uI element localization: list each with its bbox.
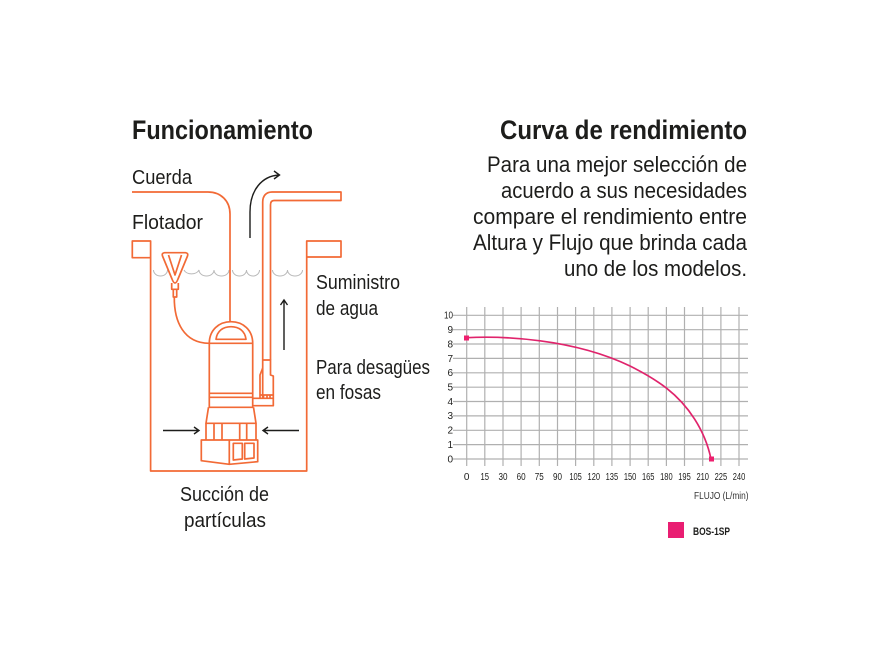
discharge pipe <box>263 192 341 398</box>
label: Succión de partículas <box>180 484 269 532</box>
x axis labels: 195 <box>678 472 691 483</box>
label: Para desagües en fosas <box>316 357 430 404</box>
x axis labels: 90 <box>553 472 562 483</box>
axis title: FLUJO (L/min) <box>694 491 748 502</box>
pit walls <box>132 241 341 471</box>
legend <box>668 522 730 538</box>
y axis labels: 9 <box>447 325 453 336</box>
arrow: water out <box>250 171 280 238</box>
arrow: suction right <box>263 427 299 434</box>
y axis labels <box>444 310 453 466</box>
legend label: BOS-1SP <box>693 526 730 538</box>
x axis labels: 30 <box>498 472 508 483</box>
y axis labels: 10 <box>444 310 453 322</box>
legend swatch <box>668 522 684 538</box>
y axis labels: 0 <box>447 454 453 466</box>
heading: Funcionamiento: Funcionamiento <box>132 115 313 145</box>
y axis labels: 6 <box>447 368 453 379</box>
x axis labels <box>464 472 746 483</box>
x axis labels: 225 <box>715 472 727 483</box>
x axis labels: 135 <box>606 472 618 483</box>
chart: performance curve <box>444 307 748 502</box>
label: Cuerda: Cuerda <box>132 167 193 189</box>
x axis labels: 210 <box>696 472 709 483</box>
text block: description: compare el rendimiento entre <box>473 204 747 229</box>
pump <box>201 322 273 464</box>
label: Succión de partículas: partículas <box>184 510 266 532</box>
curve <box>467 337 711 459</box>
x axis labels: 240 <box>733 472 746 483</box>
label: Suministro de agua: de agua <box>316 298 379 320</box>
text block: description: acuerdo a sus necesidades <box>501 178 747 203</box>
x axis labels: 15 <box>481 472 489 483</box>
label: Suministro de agua: Suministro <box>316 272 400 294</box>
grid <box>453 307 748 466</box>
y axis labels: 1 <box>447 440 453 451</box>
y axis labels: 8 <box>447 340 453 350</box>
x axis labels: 180 <box>660 472 673 483</box>
text block: description: uno de los modelos. <box>564 256 747 281</box>
label: Succión de partículas: Succión de <box>180 484 269 506</box>
x axis labels: 0 <box>464 472 470 483</box>
x axis labels: 75 <box>535 472 544 483</box>
text block: description: Para una mejor selección de <box>487 152 747 177</box>
y axis labels: 2 <box>447 426 453 436</box>
text block: description <box>473 152 748 281</box>
x axis labels: 120 <box>588 472 600 483</box>
text block: description: Altura y Flujo que brinda cada <box>473 230 748 255</box>
label: Flotador: Flotador <box>132 212 203 234</box>
label: Para desagües en fosas: Para desagües <box>316 357 430 379</box>
x axis labels: 150 <box>624 472 637 483</box>
diagram: pump in pit <box>132 171 341 471</box>
curve end marker <box>709 456 714 462</box>
y axis labels: 3 <box>447 411 453 422</box>
arrow: suction left <box>163 427 199 434</box>
rope <box>132 192 230 322</box>
y axis labels: 4 <box>447 397 453 408</box>
float switch <box>162 253 209 343</box>
curve start marker <box>464 336 469 340</box>
label: Suministro de agua <box>316 272 400 320</box>
label: Para desagües en fosas: en fosas <box>316 382 381 404</box>
x axis labels: 105 <box>569 472 582 483</box>
x axis labels: 165 <box>642 472 655 483</box>
y axis labels: 5 <box>447 382 453 394</box>
arrow: water up <box>280 300 288 350</box>
y axis labels: 7 <box>447 354 453 365</box>
heading: Curva de rendimiento: Curva de rendimiento <box>500 115 747 145</box>
water surface <box>154 270 302 276</box>
x axis labels: 60 <box>517 472 526 483</box>
